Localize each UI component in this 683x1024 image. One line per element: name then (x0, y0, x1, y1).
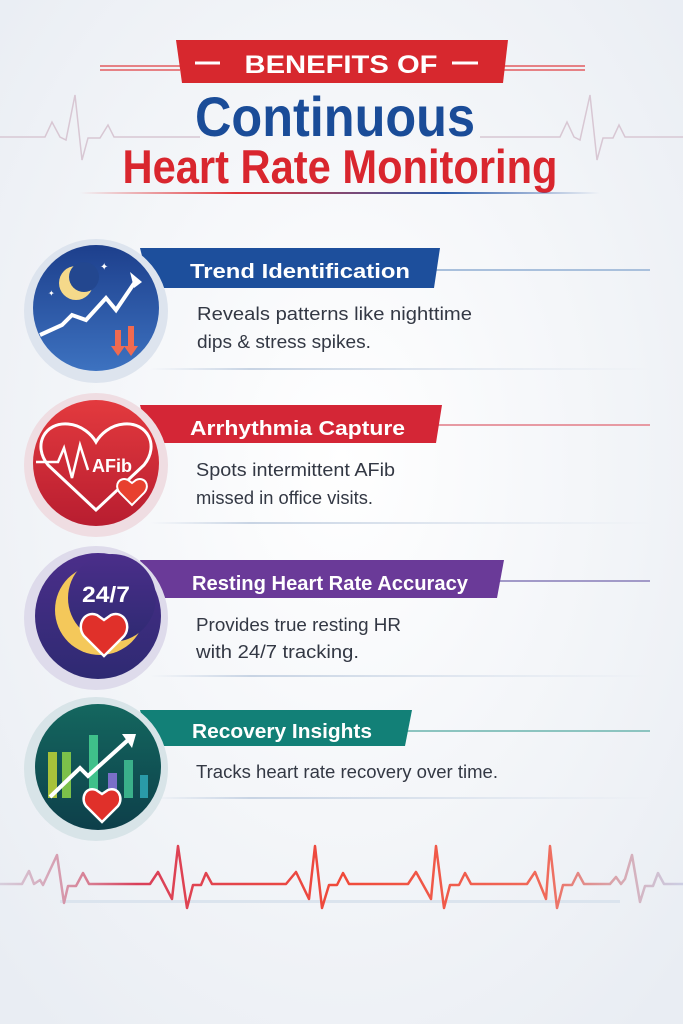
row 2: Arrhythmia Capture: Spots intermittent AFib (196, 459, 395, 480)
title banner: BENEFITS OF: BENEFITS OF (244, 51, 438, 79)
title: Continuous: Continuous (195, 85, 475, 148)
icon: heart with AFib (24, 393, 168, 537)
row 3: Resting Heart Rate Accuracy: Resting Heart Rate Accuracy (192, 573, 469, 595)
row 1: Trend Identification: Reveals patterns like nighttime (197, 303, 472, 324)
row 3: Resting Heart Rate Accuracy: Provides true resting HR (196, 614, 401, 635)
title: Heart Rate Monitoring: Heart Rate Monitoring (122, 140, 558, 193)
icon: moon 24/7 heart: 24/7 (82, 582, 130, 607)
icon: heart with AFib: AFib (92, 456, 132, 476)
row 2: Arrhythmia Capture: Arrhythmia Capture (190, 418, 405, 440)
row 2: Arrhythmia Capture: missed in office visits. (196, 487, 373, 508)
icon: moon and trend (24, 239, 168, 383)
row 4: Recovery Insights: Tracks heart rate recovery over time. (196, 761, 498, 782)
footer ECG (0, 846, 683, 908)
icon: moon and trend: ✦ (100, 262, 108, 273)
row 3: Resting Heart Rate Accuracy: with 24/7 tracking. (195, 641, 359, 662)
icon: bars and rising arrow (24, 697, 168, 841)
header ECG lines (0, 95, 683, 160)
row 2: Arrhythmia Capture (24, 393, 650, 537)
row 4: Recovery Insights: Recovery Insights (192, 721, 372, 743)
row 3: Resting Heart Rate Accuracy (24, 546, 650, 690)
row 1: Trend Identification (24, 239, 650, 383)
row 4: Recovery Insights (24, 697, 650, 841)
icon: moon 24/7 heart (24, 546, 168, 690)
row 1: Trend Identification: Trend Identification (190, 261, 410, 283)
row 1: Trend Identification: dips & stress spikes. (197, 331, 371, 352)
title banner: BENEFITS OF (100, 40, 585, 83)
icon: moon and trend: ✦ (48, 289, 55, 298)
